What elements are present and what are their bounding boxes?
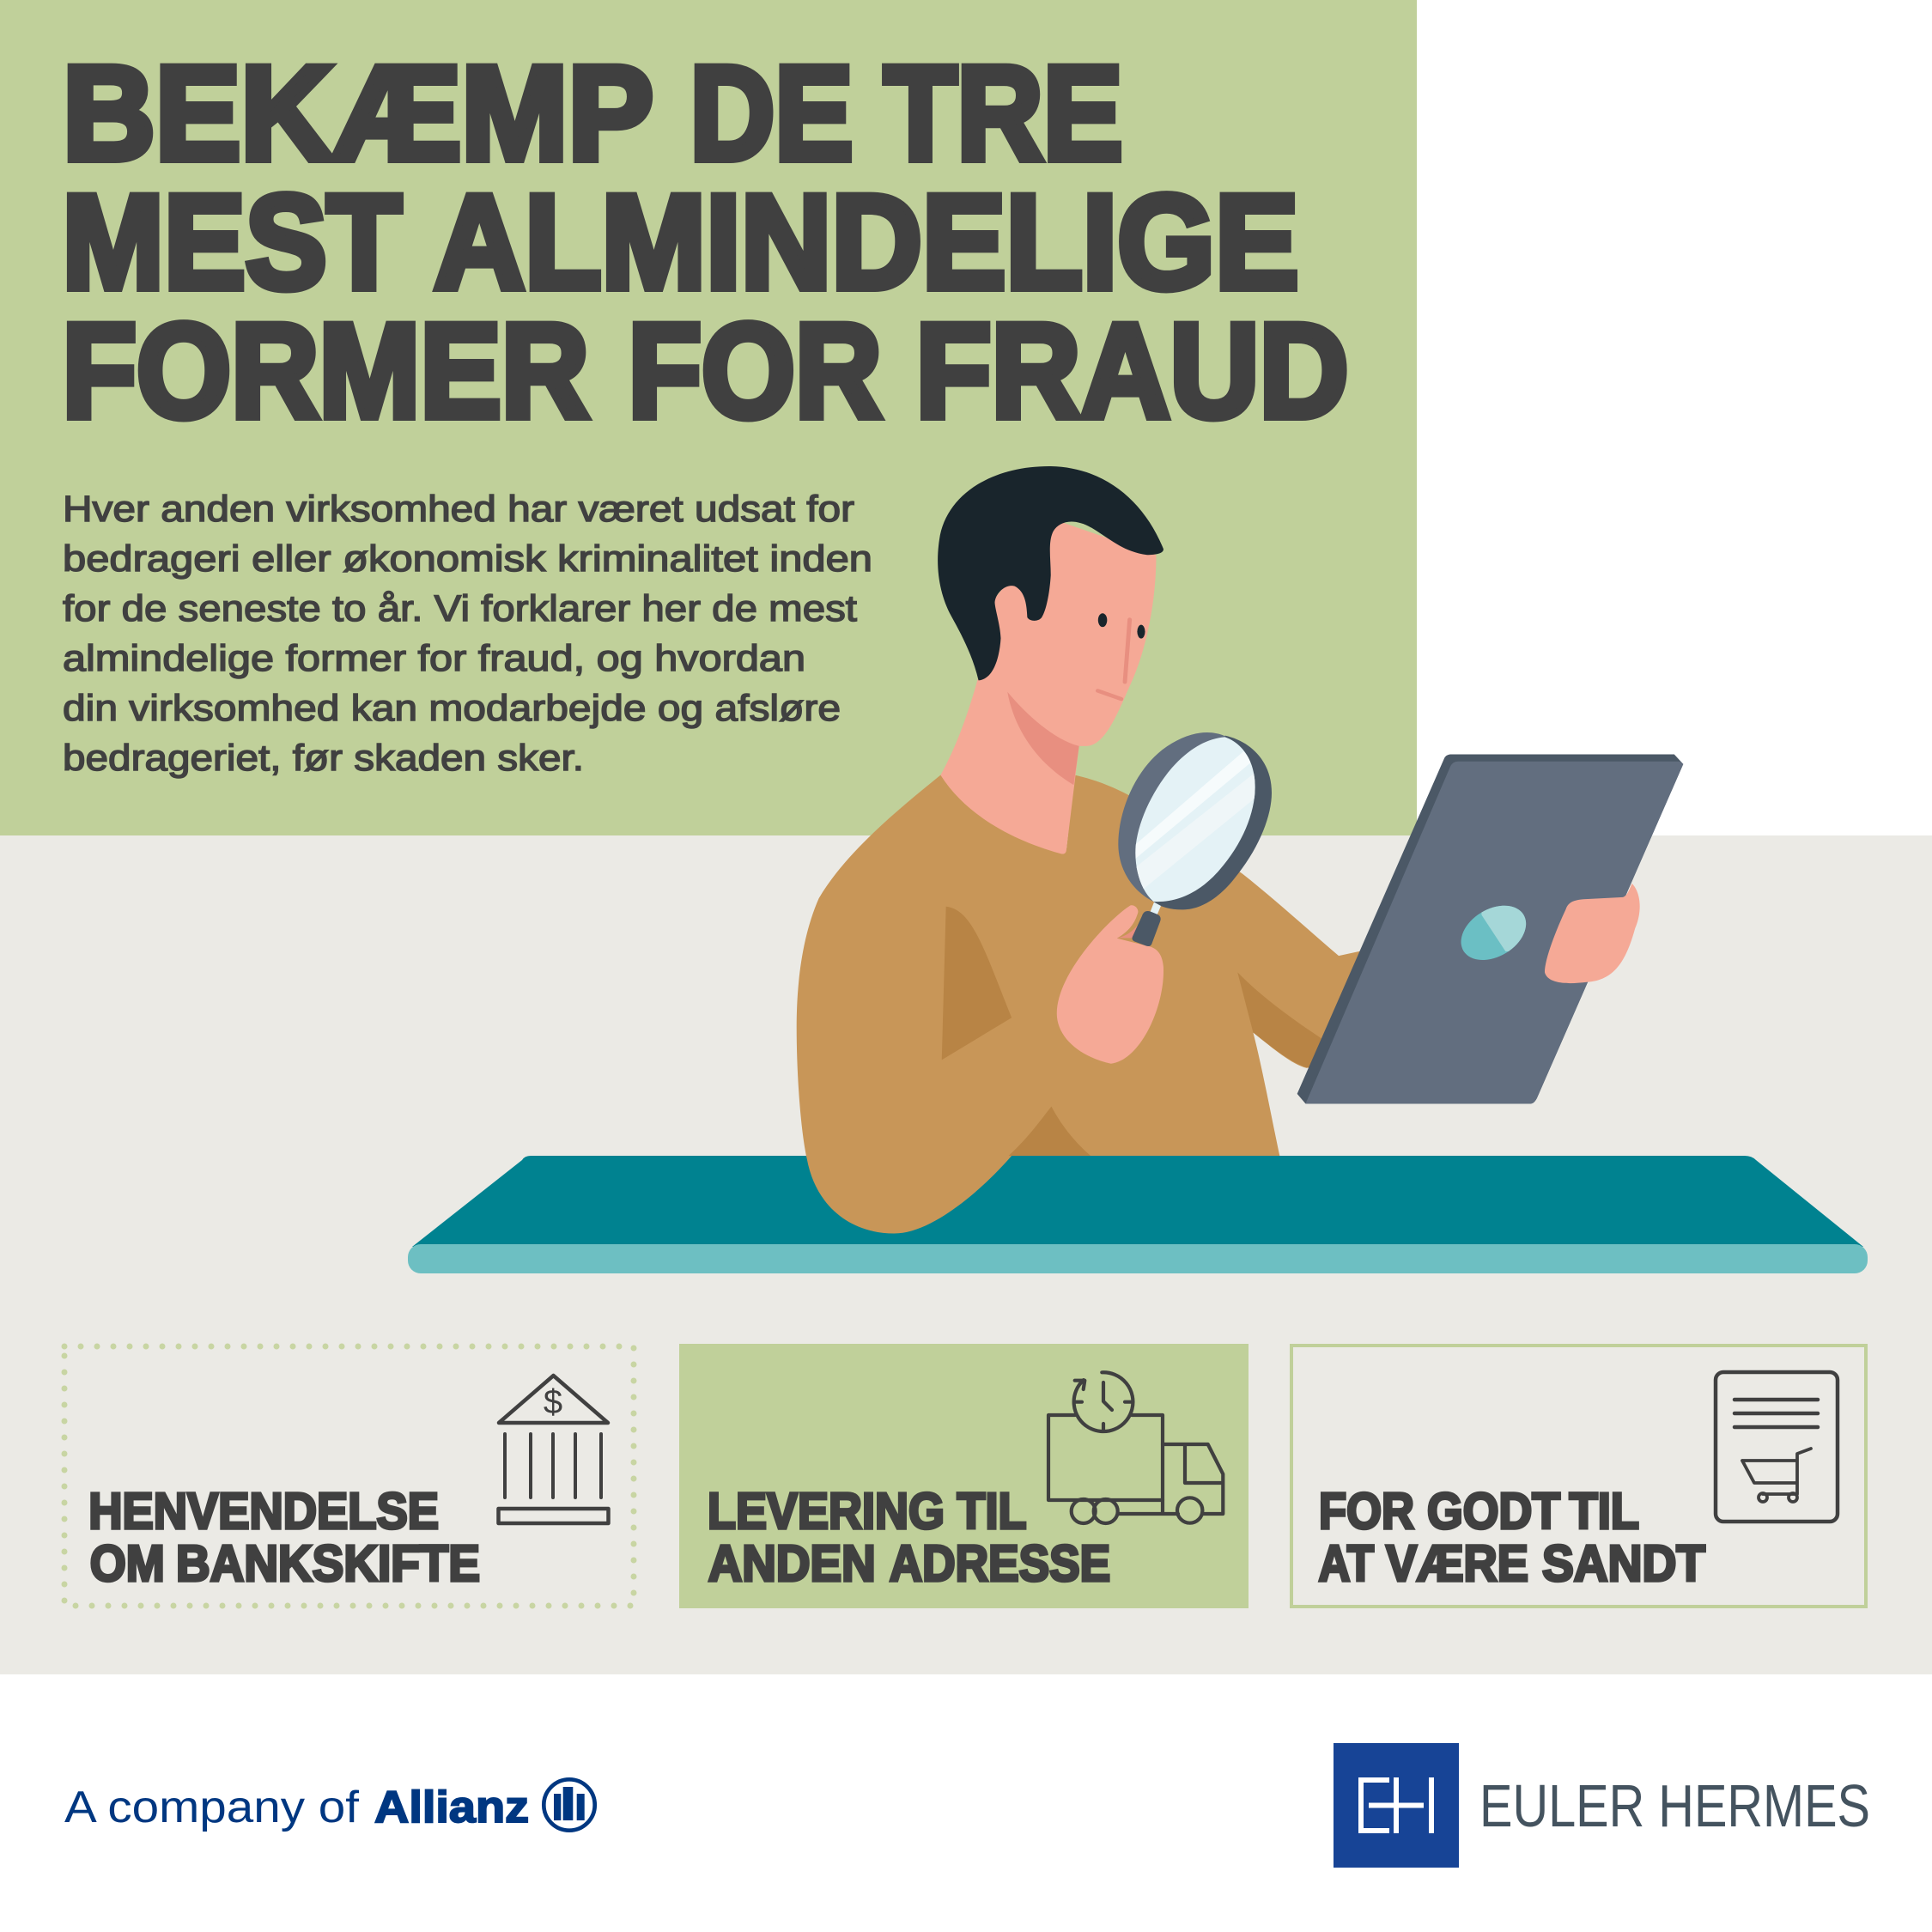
tablet xyxy=(1297,754,1683,1103)
icon: bank: $ xyxy=(544,1383,562,1421)
intro text block: bedrageri eller økonomisk kriminalitet inden xyxy=(63,538,872,580)
title: BEKÆMP xyxy=(63,39,653,189)
logo: A company of Allianz: Allianz xyxy=(374,1783,529,1832)
intro text block: din virksomhed kan modarbejde og afsløre xyxy=(63,688,841,729)
logo: A company of Allianz xyxy=(64,1779,595,1832)
card 2 heading: ADRESSE xyxy=(890,1535,1110,1592)
right hand xyxy=(1545,884,1640,983)
nose and mouth xyxy=(1097,620,1130,699)
logo: Euler Hermes xyxy=(1334,1743,1870,1868)
card 3 heading: FOR xyxy=(1319,1483,1414,1540)
card 3 heading: GODT xyxy=(1427,1483,1560,1540)
hair xyxy=(938,466,1163,680)
card 2 heading xyxy=(708,1483,1110,1592)
neck shadow xyxy=(1007,692,1079,785)
panel: card 2, delivery to another address xyxy=(679,1344,1249,1608)
card 3 heading: TIL xyxy=(1570,1483,1639,1540)
card 2 heading: TIL xyxy=(957,1483,1027,1540)
card 2 heading: ANDEN xyxy=(708,1535,876,1592)
icon: bank xyxy=(498,1376,608,1523)
title xyxy=(62,39,1348,447)
card 2 heading: LEVERING xyxy=(708,1483,945,1540)
card 1 heading: OM xyxy=(90,1535,165,1592)
torso and arm xyxy=(797,775,1364,1234)
left hand xyxy=(1057,905,1163,1064)
intro text block: bedrageriet, før skaden sker. xyxy=(63,738,584,779)
card 1 heading: HENVENDELSE xyxy=(88,1483,439,1540)
title: FOR xyxy=(629,297,882,447)
card 3 heading: VÆRE xyxy=(1386,1535,1528,1592)
eyes xyxy=(1098,613,1145,639)
panel: green header xyxy=(0,0,1417,835)
head and neck xyxy=(940,520,1156,854)
panel: card 1, bank transfer request xyxy=(64,1346,634,1606)
panel: card 3, too good to be true xyxy=(1291,1346,1866,1607)
title: TRE xyxy=(884,39,1123,189)
intro text block: for de seneste to år. Vi forklarer her de mest xyxy=(63,588,857,629)
magnifying glass xyxy=(1118,732,1272,946)
title: FRAUD xyxy=(915,297,1348,447)
torso shadow xyxy=(1009,1107,1091,1156)
title: FORMER xyxy=(62,297,589,447)
card 3 heading: AT xyxy=(1319,1535,1374,1592)
title: DE xyxy=(690,39,854,189)
icon: delivery truck with clock xyxy=(1048,1372,1223,1523)
card 1 heading: BANKSKIFTE xyxy=(176,1535,480,1592)
card 1 heading xyxy=(88,1483,480,1592)
illustration: man with tablet xyxy=(797,466,1683,1234)
card 3 heading: SANDT xyxy=(1542,1535,1705,1592)
title: ALMINDELIGE xyxy=(434,168,1298,318)
table xyxy=(408,1156,1868,1273)
logo: A company of Allianz: A company of xyxy=(64,1783,360,1832)
card 3 heading xyxy=(1319,1483,1705,1592)
sleeve shadow: left xyxy=(942,907,1012,1060)
intro text block: Hver anden virksomhed har været udsat for xyxy=(63,489,854,530)
intro text block: almindelige former for fraud, og hvordan xyxy=(63,638,805,679)
intro text block xyxy=(63,489,872,779)
icon: document with shopping cart xyxy=(1716,1372,1838,1522)
title: MEST xyxy=(62,168,402,318)
panel: grey background xyxy=(0,835,1932,1674)
sleeve shadow: right xyxy=(1237,972,1325,1068)
